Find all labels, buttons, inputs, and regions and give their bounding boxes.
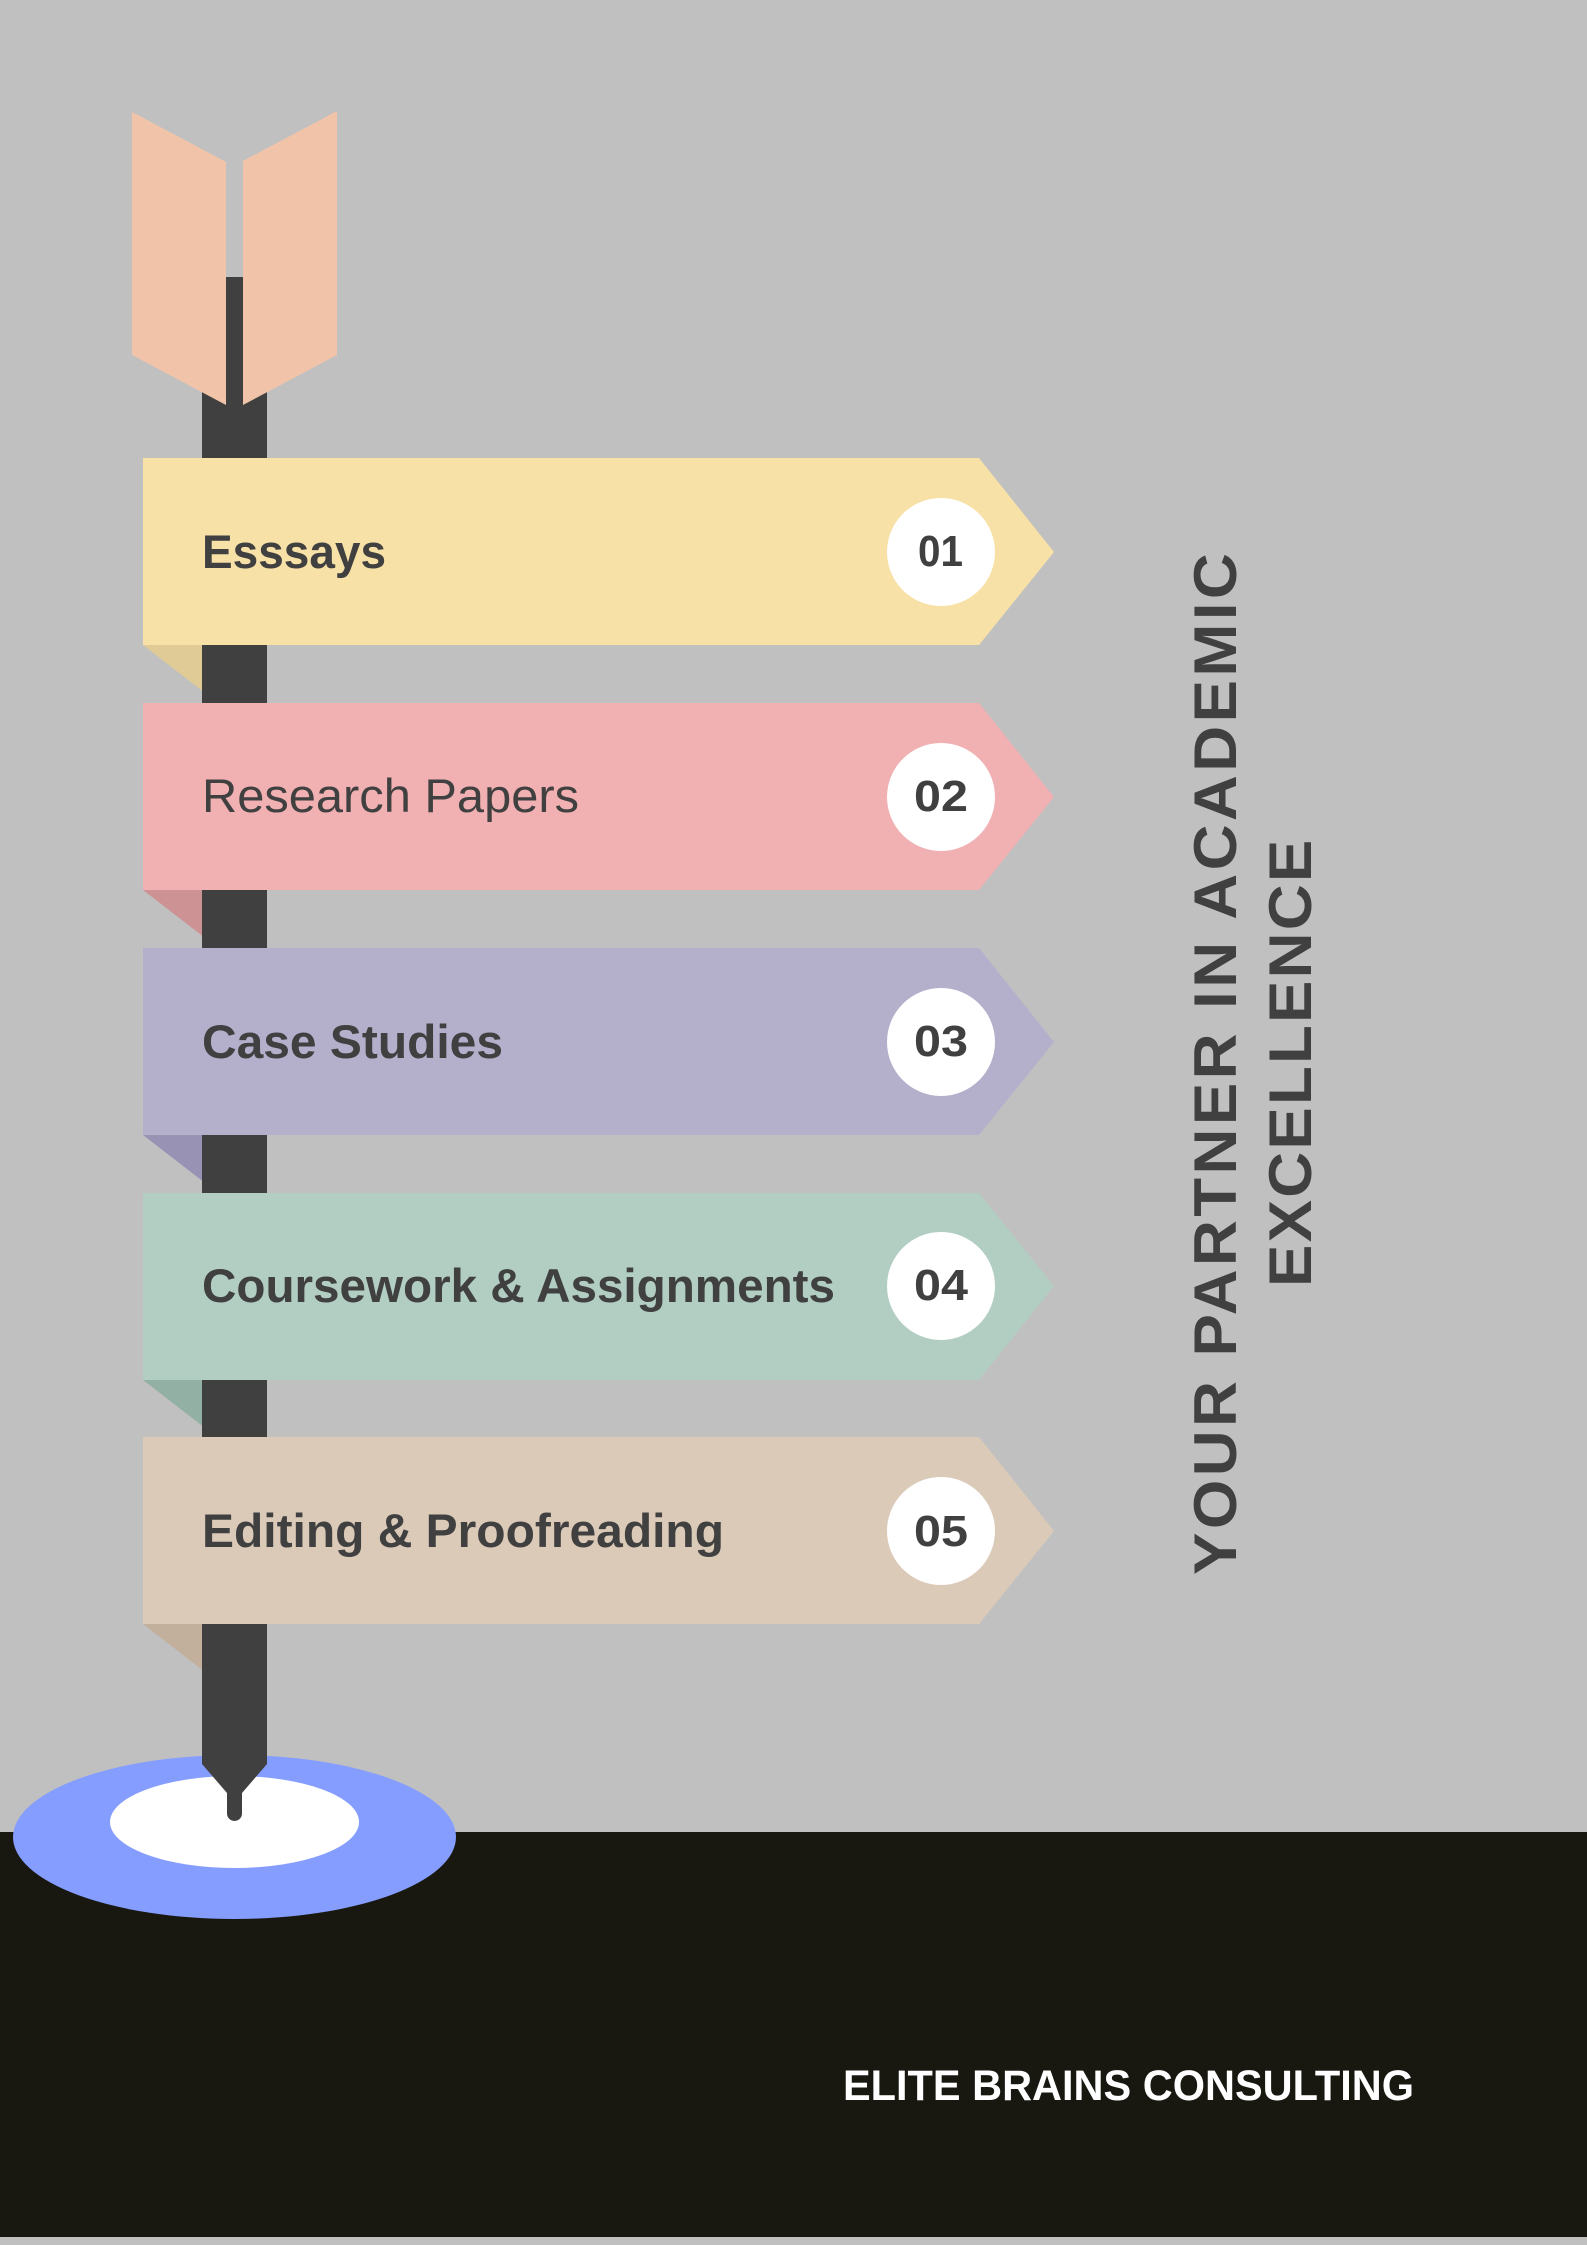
banner 02: Research Papers (143, 703, 1054, 890)
banner 01: Essays (143, 458, 1054, 645)
banner 05: Editing and Proofreading: Editing & Proofreading (202, 1504, 724, 1557)
banner 01: Essays: 01 (918, 527, 963, 576)
banner 02: Research Papers: 02 (914, 772, 968, 821)
banner 03: Case Studies (143, 948, 1054, 1135)
vertical tagline (1183, 553, 1325, 1575)
banner 02: Research Papers: Research Papers (202, 769, 579, 822)
banner 03: Case Studies: 03 (914, 1017, 968, 1066)
icon: arrow fletching (132, 111, 337, 405)
banner 03: Case Studies: Case Studies (202, 1015, 503, 1068)
banner 04: Coursework and Assignments: 04 (914, 1261, 969, 1310)
icon: target base (13, 1755, 456, 1919)
banner 04: Coursework and Assignments (143, 1193, 1054, 1380)
banner 05: Editing and Proofreading (143, 1437, 1054, 1624)
vertical tagline: EXCELLENCE (1258, 840, 1325, 1287)
banner 05: Editing and Proofreading: 05 (914, 1507, 968, 1556)
dark footer band (0, 1832, 1587, 2237)
vertical tagline: YOUR PARTNER IN ACADEMIC (1183, 553, 1250, 1575)
fold shadows behind banners (143, 645, 202, 1670)
banner 01: Essays: Esssays (202, 525, 386, 578)
banner 04: Coursework and Assignments: Coursework & Assignments (202, 1259, 835, 1312)
arrow shaft and nib (202, 277, 267, 1821)
footer brand name: ELITE BRAINS CONSULTING (843, 2062, 1414, 2110)
